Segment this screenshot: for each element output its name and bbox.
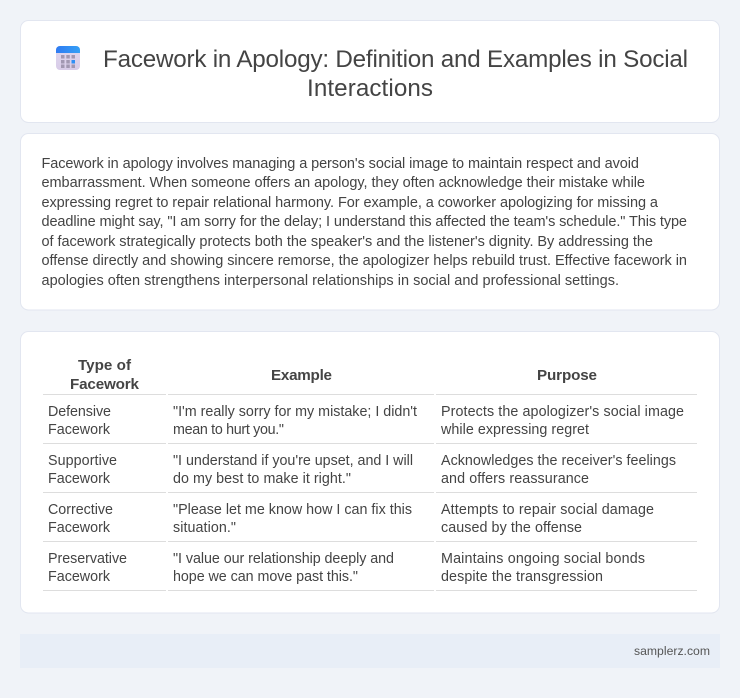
table row: supportive: "I understand if you're upset, and I will: [173, 453, 413, 469]
table row: corrective: caused by the offense: [441, 520, 582, 536]
footer source text: samplerz.com: [634, 644, 710, 658]
text block: description paragraph: embarrassment. When someone offers an apology, they often acknowledge their mistake while: [42, 175, 645, 191]
panel: description: [20, 134, 720, 310]
text block: description paragraph: [42, 156, 687, 289]
icon: calendar: [56, 46, 80, 70]
panel: title card: [20, 20, 720, 122]
table row: corrective: [43, 502, 697, 542]
table row: preservative: hope we can move past this.": [173, 569, 358, 585]
table header: Type of: [78, 357, 132, 374]
table row: defensive: [43, 404, 697, 444]
table row: supportive: do my best to make it right.": [173, 471, 351, 487]
table row: preservative: [43, 551, 697, 591]
table row: supportive: Supportive: [48, 453, 117, 469]
table row: defensive: Defensive: [48, 404, 111, 420]
table row: supportive: Acknowledges the receiver's feelings: [441, 453, 676, 469]
text block: description paragraph: apologies often strengthens interpersonal relationships in social and professional settings.: [42, 273, 619, 289]
text block: description paragraph: deadline might say, "I am sorry for the delay; I understand this affected the team's schedule." This type: [42, 214, 687, 230]
table row: preservative: Facework: [48, 569, 111, 585]
table row: defensive: while expressing regret: [440, 422, 589, 438]
title: [103, 46, 688, 102]
table row: preservative: Maintains ongoing social bonds: [441, 551, 645, 567]
table row: defensive: Protects the apologizer's social image: [441, 404, 684, 420]
table row: defensive: mean to hurt you.": [173, 422, 284, 438]
title: Facework in Apology: Definition and Examples in Social: [103, 46, 688, 73]
table row: corrective: Facework: [48, 520, 111, 536]
table row: corrective: situation.": [173, 520, 236, 536]
text block: description paragraph: expressing regret to repair relational harmony. For example, a coworker apologizing for missing a: [42, 195, 659, 211]
table row: preservative: Preservative: [48, 551, 127, 567]
panel: facework table: [20, 332, 720, 613]
text block: description paragraph: Facework in apology involves managing a person's social image to maintain respect and avoid: [42, 156, 639, 172]
table header: Example: [271, 367, 332, 384]
table row: preservative: despite the transgression: [441, 569, 603, 585]
text block: description paragraph: of facework strategically protects both the speaker's and the listener's dignity. By addressing the: [42, 234, 653, 250]
title: Interactions: [307, 75, 433, 102]
table row: defensive: "I'm really sorry for my mistake; I didn't: [173, 404, 417, 420]
table row: defensive: Facework: [48, 422, 111, 438]
table row: supportive: Facework: [48, 471, 111, 487]
table row: supportive: [43, 453, 697, 493]
table header: Facework: [70, 376, 140, 393]
table header: [43, 357, 697, 395]
table row: preservative: "I value our relationship deeply and: [173, 551, 394, 567]
table row: supportive: and offers reassurance: [441, 471, 589, 487]
table header: Purpose: [537, 367, 597, 384]
table row: corrective: Corrective: [48, 502, 113, 518]
footer: [20, 634, 720, 668]
table row: corrective: Attempts to repair social damage: [441, 502, 654, 518]
text block: description paragraph: offense directly and showing sincere remorse, the apologizer helps rebuild trust. Effective facework in: [42, 253, 687, 269]
table row: corrective: "Please let me know how I can fix this: [173, 502, 412, 518]
